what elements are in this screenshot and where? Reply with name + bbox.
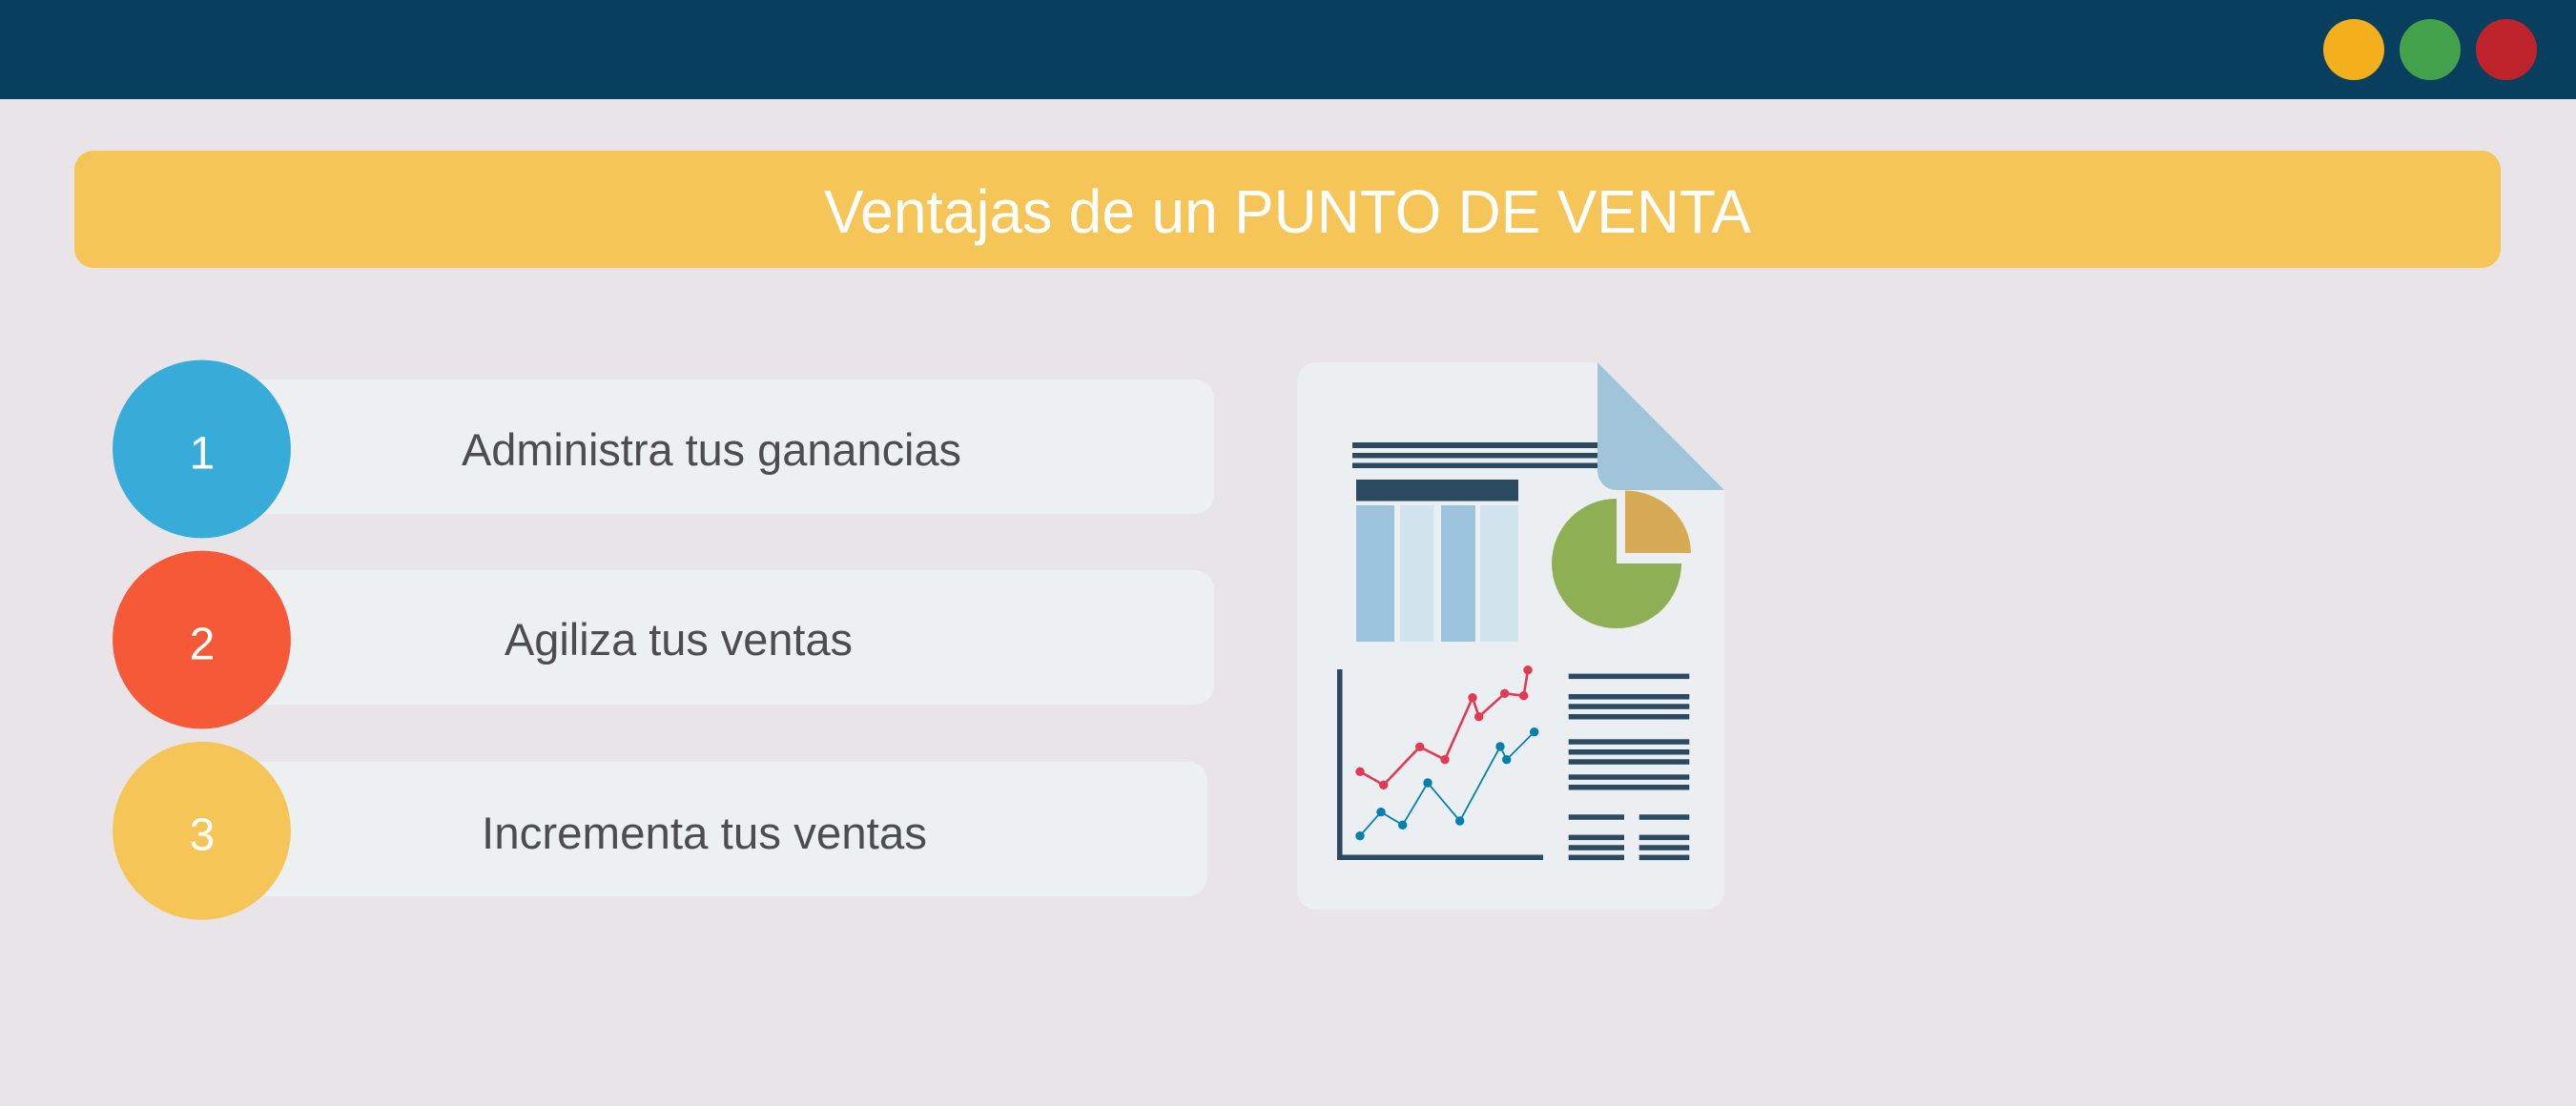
text: Agiliza tus ventas: Agiliza tus ventas [505, 614, 853, 665]
list item 3 [113, 742, 1207, 920]
list item 1 [113, 360, 1214, 538]
icon: number circle 1 [113, 360, 291, 538]
chart axes [1337, 669, 1543, 860]
icon: green window dot [2400, 19, 2461, 80]
document page [1297, 362, 1724, 910]
number 1: 1 [190, 429, 215, 479]
table graphic [1356, 480, 1518, 642]
icon: report document [1297, 362, 1724, 910]
number 3: 3 [190, 810, 215, 861]
icon: number circle 3 [113, 742, 291, 920]
heading lines [1352, 442, 1597, 468]
icon: number circle 2 [113, 551, 291, 728]
text lines block [1569, 674, 1689, 860]
blue data series [1355, 727, 1538, 840]
title banner [74, 151, 2501, 268]
text: Administra tus ganancias: Administra tus ganancias [462, 424, 961, 475]
pie chart [1552, 490, 1691, 628]
folded corner [1597, 362, 1724, 490]
text: Incrementa tus ventas: Incrementa tus ventas [482, 808, 927, 858]
title: Ventajas de un PUNTO DE VENTA [824, 177, 1751, 246]
line chart [1337, 666, 1543, 860]
icon: yellow window dot [2323, 19, 2384, 80]
number 2: 2 [190, 620, 215, 669]
icon: red window dot [2476, 19, 2537, 80]
red data series [1355, 666, 1533, 789]
top header bar [0, 0, 2576, 99]
list item 2 [113, 551, 1214, 728]
